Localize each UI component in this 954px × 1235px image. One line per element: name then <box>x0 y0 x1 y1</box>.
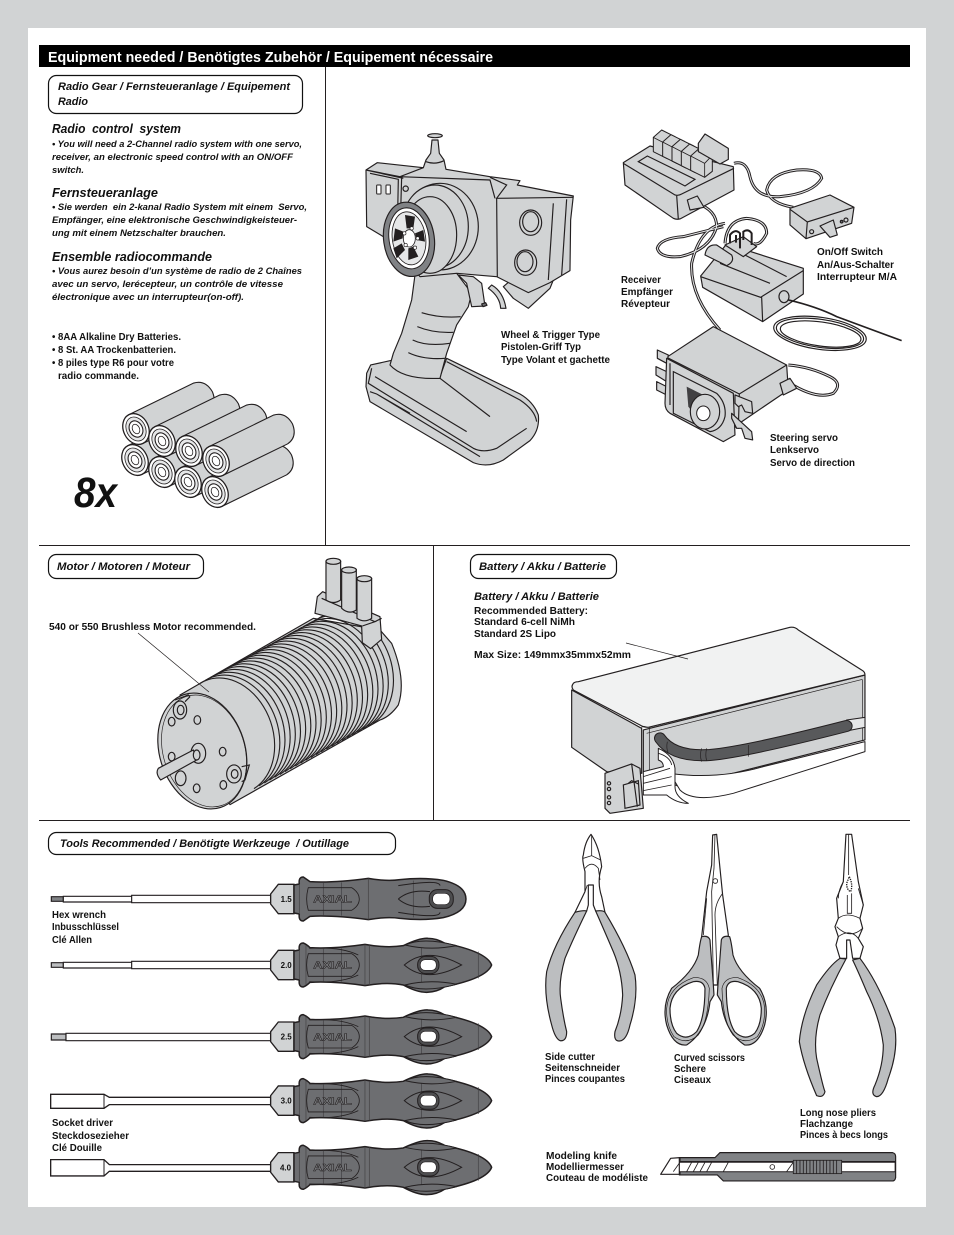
heading pill: motor <box>48 554 204 578</box>
text block: batteries list: • 8AA Alkaline Dry Batteries. <box>52 332 181 343</box>
label: long nose pliers: Long nose pliers <box>800 1108 876 1119</box>
label: steering servo: Lenkservo <box>770 445 819 456</box>
text block: recommended battery: Standard 6-cell NiMh <box>474 617 575 628</box>
icon: brushless motor <box>143 558 401 821</box>
icon: curved scissors <box>665 834 766 1045</box>
screwdriver 2.5: 2.5 <box>281 1033 292 1042</box>
text block: Fernsteueranlage <box>52 186 307 239</box>
icon: receiver, speed control, servo and switch <box>623 130 902 442</box>
text block: Fernsteueranlage: ung mit einem Netzschalter brauchen. <box>52 228 226 239</box>
label: steering servo: Servo de direction <box>770 458 855 469</box>
label: modeling knife: Modelliermesser <box>546 1162 624 1173</box>
label: curved scissors: Schere <box>674 1064 706 1075</box>
label: wheel and trigger type: Wheel & Trigger Type <box>501 330 600 341</box>
label: curved scissors <box>674 1053 745 1086</box>
icon: long nose pliers <box>799 834 896 1097</box>
label: receiver: Empfänger <box>621 287 673 298</box>
text block: recommended battery: Recommended Battery: <box>474 606 588 617</box>
label: socket driver: Socket driver <box>52 1118 113 1129</box>
text block: radio control system: • You will need a 2-Channel radio system with one servo, <box>52 139 302 150</box>
switch <box>790 195 854 239</box>
header bar: equipment needed <box>39 45 910 67</box>
text block: recommended battery: Standard 2S Lipo <box>474 629 556 640</box>
header bar: equipment needed: Equipment needed / Benötigtes Zubehör / Equipement nécessaire <box>48 50 493 66</box>
icon: battery pack <box>572 627 865 813</box>
screwdriver 4.0 <box>51 1141 492 1195</box>
text block: recommended battery: Battery / Akku / Batterie <box>474 591 599 603</box>
label: on/off switch: Interrupteur M/A <box>817 272 897 283</box>
label: hex wrench: Hex wrench <box>52 910 106 921</box>
screwdriver 4.0: 4.0 <box>280 1163 292 1172</box>
label: hex wrench <box>52 910 119 946</box>
screwdriver 1.5: AXIAL <box>313 895 352 906</box>
screwdriver 3.0 <box>51 1074 492 1128</box>
screwdriver 2.0 <box>51 938 492 992</box>
label: motor recommendation: 540 or 550 Brushless Motor recommended. <box>49 622 256 633</box>
label: side cutter: Seitenschneider <box>545 1063 620 1074</box>
wheel <box>379 199 439 280</box>
receiver <box>701 244 803 322</box>
text block: radio control system: switch. <box>52 165 84 176</box>
icon: modeling knife <box>661 1153 896 1181</box>
text block: Fernsteueranlage: Fernsteueranlage <box>52 186 158 200</box>
label: modeling knife: Modeling knife <box>546 1151 617 1162</box>
heading pill: battery <box>470 554 616 578</box>
text block: Ensemble radiocommande <box>52 250 302 303</box>
leader line: motor <box>138 633 209 692</box>
label: long nose pliers: Flachzange <box>800 1119 853 1130</box>
text block: batteries list: • 8 piles type R6 pour votre <box>52 358 174 369</box>
label: hex wrench: Clé Allen <box>52 935 92 946</box>
label: hex wrench: Inbusschlüssel <box>52 922 119 933</box>
label: curved scissors: Curved scissors <box>674 1053 745 1064</box>
text block: radio control system: receiver, an electronic speed control with an ON/OFF <box>52 152 293 163</box>
text block: recommended battery: Max Size: 149mmx35mmx52mm <box>474 650 631 661</box>
label: socket driver: Steckdosezieher <box>52 1131 129 1142</box>
icon: side cutter <box>546 834 636 1041</box>
heading pill: battery: Battery / Akku / Batterie <box>479 561 606 573</box>
label: side cutter: Side cutter <box>545 1052 595 1063</box>
label: side cutter: Pinces coupantes <box>545 1074 625 1085</box>
label: socket driver <box>52 1118 129 1154</box>
label: wheel and trigger type: Pistolen-Griff Typ <box>501 342 581 353</box>
icon: wheel and trigger transmitter <box>366 134 573 465</box>
label: on/off switch <box>817 247 897 283</box>
leader line: battery <box>626 643 688 659</box>
label: curved scissors: Ciseaux <box>674 1075 711 1086</box>
label: steering servo: Steering servo <box>770 433 838 444</box>
screwdriver 1.5: 1.5 <box>281 895 292 904</box>
label: receiver: Révepteur <box>621 299 670 310</box>
heading pill: radio gear <box>48 76 302 114</box>
text block: Ensemble radiocommande: • Vous aurez besoin d’un système de radio de 2 Chaînes <box>52 266 302 277</box>
label: receiver: Receiver <box>621 275 661 286</box>
label: socket driver: Clé Douille <box>52 1143 102 1154</box>
text block: batteries list: • 8 St. AA Trockenbatterien. <box>52 345 176 356</box>
label: side cutter <box>545 1052 625 1085</box>
label: steering servo <box>770 433 855 469</box>
screwdriver 4.0: AXIAL <box>313 1163 352 1174</box>
icon: eight AA batteries <box>117 377 299 512</box>
label: wheel and trigger type: Type Volant et gachette <box>501 355 610 366</box>
screwdriver 3.0: 3.0 <box>281 1097 292 1106</box>
label: long nose pliers <box>800 1108 888 1141</box>
screwdrivers <box>51 877 492 1195</box>
screwdriver 1.5 <box>51 877 466 921</box>
text block: batteries list: radio commande. <box>58 371 139 382</box>
label: wheel and trigger type <box>501 330 610 366</box>
text block: Ensemble radiocommande: Ensemble radiocommande <box>52 250 212 264</box>
label: modeling knife: Couteau de modéliste <box>546 1173 648 1184</box>
heading pill: tools <box>48 832 396 854</box>
heading pill: radio gear: Radio <box>58 96 88 108</box>
label: on/off switch: An/Aus-Schalter <box>817 260 894 271</box>
label: long nose pliers: Pinces à becs longs <box>800 1130 888 1141</box>
screwdriver 2.0: AXIAL <box>313 961 352 972</box>
screwdriver 2.0: 2.0 <box>281 961 292 970</box>
screwdriver 2.5: AXIAL <box>313 1032 352 1043</box>
heading pill: tools: Tools Recommended / Benötigte Werkzeuge / Outillage <box>60 838 349 850</box>
heading pill: motor: Motor / Motoren / Moteur <box>57 561 191 573</box>
label: receiver <box>621 275 673 310</box>
text block: Ensemble radiocommande: électronique avec un interrupteur(on-off). <box>52 292 244 303</box>
quantity label: 8x: 8x <box>74 469 119 517</box>
label: on/off switch: On/Off Switch <box>817 247 883 258</box>
screwdriver 2.5 <box>51 1010 492 1064</box>
panel: radio gear text <box>48 76 307 382</box>
servo <box>667 327 788 428</box>
heading pill: radio gear: Radio Gear / Fernsteueranlage / Equipement <box>58 81 291 93</box>
text block: radio control system: Radio control system <box>52 122 181 136</box>
label: modeling knife <box>546 1151 648 1184</box>
speed control <box>623 146 734 219</box>
text block: Ensemble radiocommande: avec un servo, lerécepteur, un contrôle de vitesse <box>52 279 284 290</box>
text block: batteries list <box>52 332 181 382</box>
screwdriver 3.0: AXIAL <box>313 1096 352 1107</box>
text block: Fernsteueranlage: • Sie werden ein 2-kanal Radio System mit einem Servo, <box>52 202 307 213</box>
text block: Fernsteueranlage: Empfänger, eine elektronische Geschwindigkeisteuer- <box>52 215 297 226</box>
text block: radio control system <box>52 122 302 176</box>
hand tools <box>546 834 896 1181</box>
wires <box>657 163 838 395</box>
text block: recommended battery <box>474 591 631 661</box>
